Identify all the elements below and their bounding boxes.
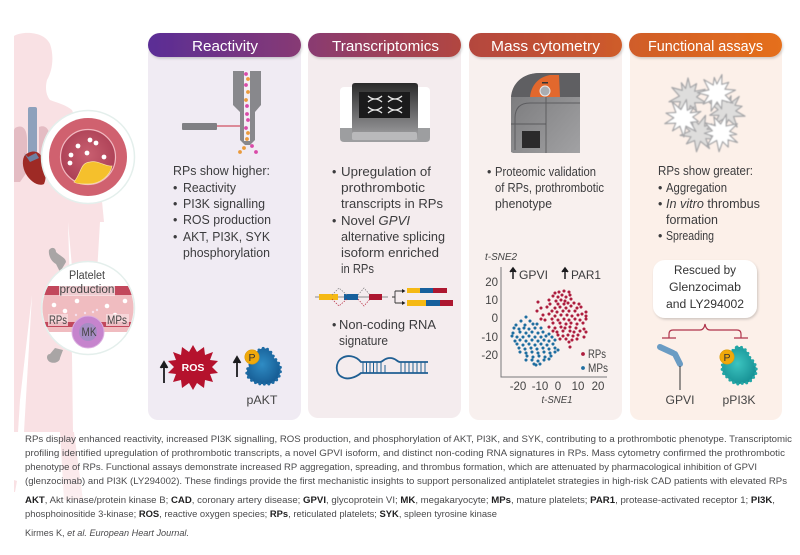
text: RPs show higher list: Reactivity	[183, 181, 237, 195]
platelet production circle: MK	[82, 327, 97, 339]
text: proteomic validation: Proteomic validation	[495, 165, 596, 179]
scatter chart: t-SNE: -20	[510, 381, 526, 393]
icon: flow cytometer nozzle	[182, 71, 261, 154]
text: RPs show higher list: ROS production	[183, 213, 271, 227]
heading: Transcriptomics	[308, 33, 461, 57]
scatter chart: t-SNE: t-SNE1	[542, 394, 572, 406]
text: RPs show higher list: •	[173, 213, 177, 227]
icon: ROS burst with up arrow	[160, 345, 218, 390]
scatter chart: t-SNE: PAR1	[571, 268, 601, 282]
caption paragraph	[25, 434, 792, 487]
text: transcriptomics findings: Novel GPVI	[341, 214, 411, 228]
text: non-coding RNA: Non-coding RNA	[339, 318, 437, 332]
text: transcriptomics findings: alternative splicing	[341, 230, 445, 244]
text: transcriptomics findings: •	[332, 165, 336, 179]
text: RPs show greater list: •	[658, 197, 662, 211]
platelet production circle: Platelet	[69, 270, 106, 282]
panel: functional assays	[629, 33, 782, 420]
text: proteomic validation: phenotype	[495, 197, 552, 211]
text: proteomic validation: of RPs, prothrombotic	[495, 181, 604, 195]
text: transcriptomics findings	[332, 165, 445, 276]
icon: GPVI receptor: GPVI	[666, 395, 694, 407]
platelet production circle	[40, 262, 136, 354]
icon: aggregated platelets	[659, 70, 753, 158]
text: RPs show higher list: •	[173, 197, 177, 211]
icon: ROS burst with up arrow: ROS	[182, 362, 204, 374]
icon: pPI3K protein: P	[723, 352, 731, 364]
text: transcriptomics findings: •	[332, 214, 336, 228]
abbreviations: AKT, Akt kinase/protein kinase B; CAD, coronary artery disease; GPVI, glycoprotein VI; MK, megakaryocyte; MPs, mature platelets; PAR1, protease-activated receptor 1; PI3K,	[25, 495, 775, 506]
caption paragraph: RPs display enhanced reactivity, increased PI3K signalling, ROS production, and phosphorylation of AKT, PI3K, and SYK, contributing to a prothrombotic phenotype. Transcriptomic	[25, 434, 792, 445]
text: transcriptomics findings: in RPs	[341, 262, 374, 276]
text: RPs show higher list: •	[173, 230, 177, 244]
icon: pAKT protein with up arrow: pAKT	[246, 395, 278, 407]
text: RPs show greater list: •	[658, 229, 662, 243]
scatter chart: t-SNE: t-SNE2	[485, 251, 517, 263]
callout: rescued by	[653, 260, 757, 318]
heading: Mass cytometry: Mass cytometry	[491, 38, 601, 55]
scatter chart: t-SNE: 10	[572, 381, 584, 393]
scatter chart: t-SNE: 10	[485, 295, 498, 307]
abbreviations: phosphoinositide 3-kinase; ROS, reactive oxygen species; RPs, reticulated platelets; SYK, spleen tyrosine kinase	[25, 509, 497, 520]
MP data points	[512, 317, 558, 365]
caption paragraph: profiling identified upregulation of prothrombotic transcripts, a novel GPVI isoform, and distinct non-coding RNA signatures in RPs. Mass cytometry confirmed the prothrombotic	[25, 448, 785, 459]
text: non-coding RNA	[332, 318, 437, 348]
scatter chart: t-SNE: 0	[555, 381, 561, 393]
scatter chart: t-SNE: RPs	[588, 349, 606, 361]
scatter chart: t-SNE: -10	[481, 332, 498, 344]
scatter chart: t-SNE: 20	[485, 277, 498, 289]
heading: Functional assays: Functional assays	[648, 38, 763, 55]
callout: rescued by: Rescued by	[674, 265, 736, 277]
heading: Mass cytometry	[469, 33, 622, 57]
text: RPs show greater list: •	[658, 181, 662, 195]
heading: Reactivity	[148, 33, 301, 57]
scatter chart: t-SNE: -10	[532, 381, 548, 393]
inhibition bracket	[662, 324, 748, 338]
platelet production circle: RPs	[49, 315, 67, 327]
text: non-coding RNA: •	[332, 318, 336, 332]
text: RPs show higher list: PI3K signalling	[183, 197, 265, 211]
icon: sequencer	[340, 83, 430, 142]
text: transcriptomics findings: isoform enriched	[341, 246, 439, 260]
icon: pAKT protein with up arrow	[234, 348, 281, 407]
platelet production circle: MPs	[107, 315, 127, 327]
icon: mass cytometer	[511, 73, 580, 153]
icon: pAKT protein with up arrow: P	[248, 352, 256, 364]
callout: rescued by: and LY294002	[666, 299, 744, 311]
text: RPs show greater list: Aggregation	[666, 181, 727, 195]
text: RPs show greater list: Spreading	[666, 229, 714, 243]
bones	[47, 248, 66, 363]
panel: transcriptomics	[308, 33, 461, 418]
text: RPs show higher list: RPs show higher:	[173, 164, 270, 178]
citation: Kirmes K, et al. European Heart Journal.	[25, 528, 189, 539]
scatter chart: t-SNE: 0	[492, 313, 498, 325]
heading: Transcriptomics: Transcriptomics	[332, 38, 439, 55]
text: RPs show greater list: In vitro thrombus	[666, 197, 760, 211]
platelet production circle: production	[60, 284, 114, 296]
body silhouette	[14, 33, 104, 500]
panel: reactivity	[148, 33, 301, 420]
lungs, trachea and heart	[14, 107, 50, 185]
text: RPs show higher list	[173, 164, 271, 260]
text: RPs show higher list: phosphorylation	[183, 246, 270, 260]
caption paragraph: phenotype of RPs. Functional assays demonstrate increased RP aggregation, spreading, and thrombus formation, which are attenuated by pharmacological inhibition of GPVI	[25, 462, 757, 473]
text: proteomic validation	[487, 165, 604, 211]
icon: pPI3K protein: pPI3K	[722, 395, 756, 407]
text: transcriptomics findings: prothrombotic	[341, 181, 425, 195]
panel: mass cytometry	[469, 33, 622, 420]
text: transcriptomics findings: Upregulation of	[341, 165, 432, 179]
RP data points	[537, 291, 586, 347]
scatter chart: t-SNE: -20	[481, 350, 498, 362]
icon: RNA hairpin	[337, 356, 428, 378]
vessel cross-section with plaque	[42, 110, 134, 204]
text: transcriptomics findings: transcripts in RPs	[341, 197, 443, 211]
heading: Functional assays	[629, 33, 782, 57]
icon: alternative splicing diagram	[315, 288, 453, 306]
icon: pPI3K protein	[720, 347, 756, 407]
abbreviations	[25, 495, 775, 520]
icon: GPVI receptor	[660, 347, 694, 407]
text: RPs show higher list: AKT, PI3K, SYK	[183, 230, 271, 244]
scatter chart: t-SNE: 20	[592, 381, 604, 393]
text: RPs show greater list: formation	[666, 213, 718, 227]
text: proteomic validation: •	[487, 165, 491, 179]
text: RPs show greater list	[658, 164, 760, 243]
callout: rescued by: Glenzocimab	[669, 282, 741, 294]
text: RPs show higher list: •	[173, 181, 177, 195]
scatter chart: t-SNE: MPs	[588, 363, 608, 375]
scatter chart: t-SNE	[481, 251, 608, 406]
heading: Reactivity: Reactivity	[192, 38, 258, 55]
scatter chart: t-SNE: GPVI	[519, 268, 548, 282]
caption paragraph: (glenzocimab) and PI3K (LY294002). These findings provide the first mechanistic insights to support personalized antiplatelet strategies in high-risk CAD patients with elevated RPs	[25, 476, 787, 487]
text: RPs show greater list: RPs show greater:	[658, 164, 753, 178]
text: non-coding RNA: signature	[339, 334, 388, 348]
